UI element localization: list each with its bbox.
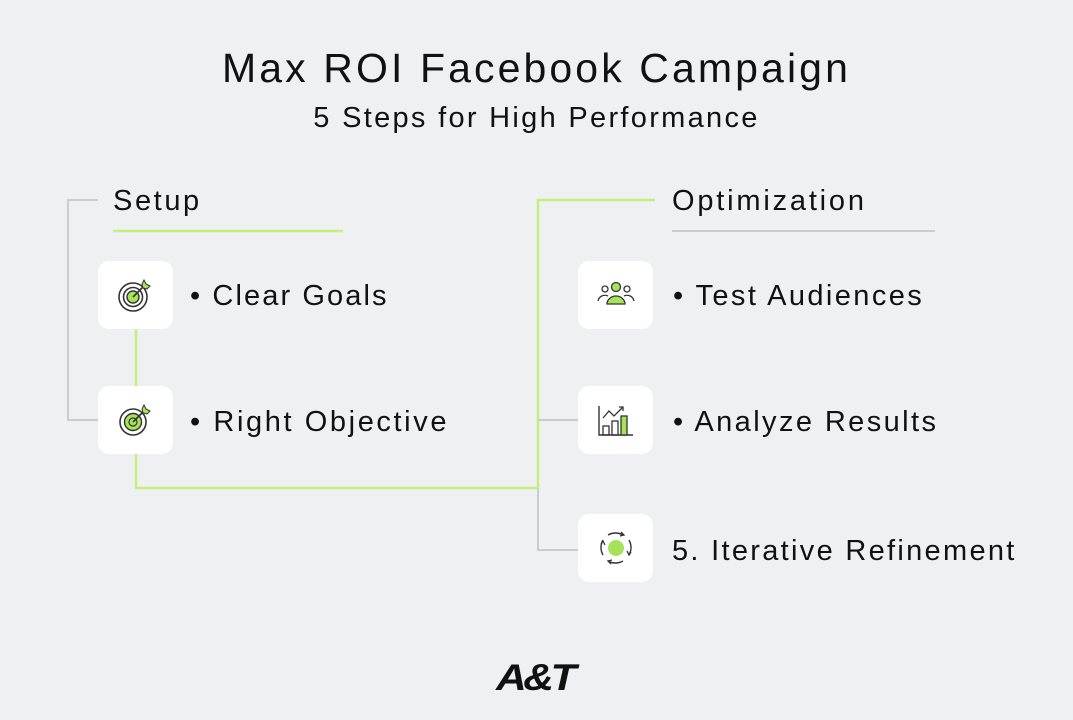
logo: A&T [496,657,573,698]
icon box: clear goals [98,261,173,329]
text: iterative refinement: 5. Iterative Refinement [672,535,1017,567]
subtitle: 5 Steps for High Performance [313,102,760,134]
title: Max ROI Facebook Campaign [222,45,851,91]
icon box: test audiences [578,261,653,329]
heading: Optimization: Optimization [672,185,867,217]
icon box: analyze results [578,386,653,454]
icon box: iterative refinement [578,514,653,582]
text: analyze results: • Analyze Results [673,406,938,438]
text: clear goals: • Clear Goals [190,280,389,312]
icon box: right objective [98,386,173,454]
text: right objective: • Right Objective [190,406,449,438]
text: test audiences: • Test Audiences [673,280,924,312]
heading: Setup: Setup [113,185,202,217]
